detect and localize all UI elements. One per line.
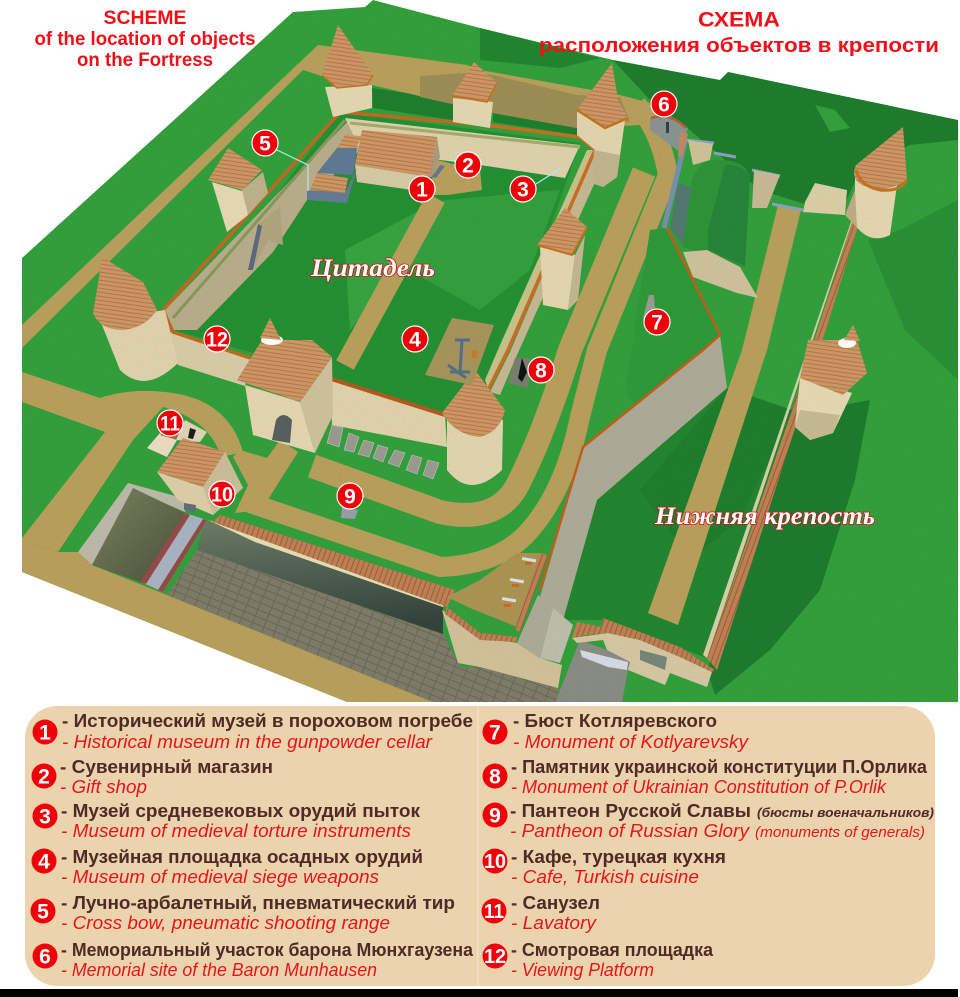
shaded section of north road — [420, 72, 630, 128]
grass light and shadow patches — [173, 28, 958, 695]
legend item 8: - Monument of Ukrainian Constitution of P.Orlik — [511, 777, 887, 797]
title, Russian: расположения объектов в крепости — [539, 35, 939, 57]
orange edge of upper fortress — [540, 228, 720, 590]
marker 4 — [402, 326, 428, 352]
legend item 12: 12 — [484, 946, 506, 968]
legend item 3: - Museum of medieval torture instruments — [61, 821, 411, 841]
legend item 4: - Museum of medieval siege weapons — [61, 867, 379, 887]
legend item 5: 5 — [37, 900, 49, 924]
moat far wall — [92, 488, 185, 583]
legend item 6 — [32, 940, 474, 980]
legend item 7 — [482, 711, 749, 752]
road in lower fortress — [648, 205, 801, 625]
monument 8 — [508, 358, 530, 388]
marker 2: 2 — [462, 154, 474, 178]
orange wall tops — [163, 112, 486, 358]
legend item 11: - Санузел — [511, 893, 600, 913]
legend item 9 — [482, 801, 934, 841]
outer road along north side — [22, 45, 650, 348]
legend item 9: (бюсты военачальников) — [757, 806, 934, 820]
moat rim — [78, 483, 190, 565]
label: citadel: Цитадель — [310, 255, 435, 282]
legend item 9: (monuments of generals) — [755, 825, 925, 841]
tiled wall top — [213, 515, 455, 607]
wall, south east face — [330, 378, 447, 447]
legend item 10: - Cafe, Turkish cuisine — [511, 867, 699, 887]
marker 5 — [252, 130, 278, 156]
round tower, south west — [93, 257, 178, 381]
fortress map scene — [0, 0, 960, 702]
round tower, south east — [442, 370, 505, 485]
marker 7 — [644, 309, 670, 335]
legend item 1: - Исторический музей в пороховом погребе — [62, 711, 473, 731]
marker 11: 11 — [160, 412, 180, 436]
legend item 9: - Пантеон Русской Славы — [510, 801, 751, 821]
tower, north middle — [452, 62, 497, 128]
marker 8 — [528, 357, 554, 383]
legend item 2: - Gift shop — [60, 777, 147, 797]
legend item 2: 2 — [38, 766, 50, 788]
inner wall, north — [345, 118, 580, 178]
siege weapons museum platform — [425, 318, 494, 385]
marker 4: 4 — [409, 328, 421, 352]
legend item 8 — [482, 757, 928, 797]
legend item 6: 6 — [39, 946, 51, 968]
map markers — [157, 91, 677, 509]
barbican tower 10 — [157, 438, 243, 515]
stone wedge left — [688, 140, 713, 165]
passage — [670, 183, 692, 245]
marker 9: 9 — [344, 486, 356, 508]
legend item 2 — [32, 757, 273, 797]
marker 12: 12 — [206, 328, 228, 352]
moat — [78, 483, 560, 702]
bottom black bar — [0, 989, 958, 997]
road around citadel, outer — [250, 105, 668, 567]
legend panel — [25, 706, 935, 986]
legend item 4: 4 — [38, 850, 50, 874]
hill stone end — [683, 250, 758, 298]
citadel walls — [163, 112, 605, 447]
legend item 10: 10 — [484, 851, 506, 873]
legend item 5: - Cross bow, pneumatic shooting range — [61, 913, 390, 933]
legend item 10 — [482, 847, 726, 887]
legend item 7: - Бюст Котляревского — [513, 711, 717, 731]
legend item 9: 9 — [489, 804, 501, 828]
legend item 10: - Кафе, турецкая кухня — [511, 847, 726, 867]
moat inner wall — [197, 520, 443, 634]
monument 7 bust — [643, 295, 655, 320]
legend item 3 — [32, 801, 421, 841]
marker 3: 3 — [517, 178, 529, 202]
road inside citadel — [345, 198, 436, 365]
memorial site 6 — [650, 116, 688, 157]
title, English: on the Fortress — [77, 50, 213, 71]
tower, north east — [577, 63, 628, 187]
right wall of lower fortress — [703, 207, 863, 670]
title, English: SCHEME — [104, 8, 186, 29]
pantheon busts row — [327, 425, 439, 479]
tower, west — [208, 148, 268, 232]
casemate hill — [664, 138, 803, 298]
sand border around moat — [22, 540, 433, 702]
tower, north west — [322, 25, 373, 117]
legend item 1: 1 — [39, 722, 51, 744]
marker 7: 7 — [651, 312, 663, 334]
legend item 12 — [482, 940, 714, 980]
legend item 4: - Музейная площадка осадных орудий — [61, 847, 423, 867]
marker 9 — [337, 483, 363, 509]
right round tower — [803, 127, 907, 238]
marker 6 — [651, 91, 677, 117]
legend item 11: - Lavatory — [511, 913, 597, 933]
legend item 9: - Pantheon of Russian Glory — [510, 821, 750, 841]
marker 6: 6 — [658, 94, 670, 116]
leader lines — [275, 149, 561, 191]
citadel scarp, lower wall — [540, 335, 727, 620]
title, Russian — [539, 8, 939, 57]
inner wall, west — [165, 122, 360, 330]
museum and shop buildings — [307, 130, 445, 203]
marker 10: 10 — [211, 484, 233, 506]
label: lower fortress: Нижняя крепость — [654, 503, 875, 530]
road junction at gate — [233, 440, 298, 513]
marker 1: 1 — [416, 178, 428, 202]
texture overlay — [22, 0, 960, 702]
sand patch by buildings — [428, 160, 482, 195]
legend item 1: - Historical museum in the gunpowder cellar — [62, 732, 433, 752]
wall, east outer — [490, 150, 605, 395]
legend item 12: - Смотровая площадка — [511, 940, 714, 960]
legend item 8: - Памятник украинской конституции П.Орлика — [511, 757, 928, 777]
marker 5: 5 — [259, 132, 271, 156]
wall, south west face — [170, 332, 250, 386]
hill grass — [683, 160, 750, 267]
title, English: of the location of objects — [34, 29, 256, 50]
wall buttress — [252, 206, 283, 270]
legend item 5: - Лучно-арбалетный, пневматический тир — [61, 893, 455, 913]
gate tower with lantern — [237, 318, 333, 453]
marker 1 — [409, 176, 435, 202]
marker 3 — [510, 176, 536, 202]
monument 9 pedestal — [341, 507, 358, 519]
sand roads network — [250, 105, 668, 567]
legend item 3: 3 — [39, 806, 51, 828]
title, Russian: СХЕМА — [698, 8, 780, 32]
corner masonry at the south — [442, 595, 715, 702]
legend item 12: - Viewing Platform — [511, 960, 654, 980]
marker 2 — [455, 152, 481, 178]
lower right round tower with lantern — [795, 325, 867, 440]
bridge — [140, 513, 207, 592]
legend item 6: - Мемориальный участок барона Мюнхгаузена — [61, 940, 474, 960]
cannon platform — [447, 553, 548, 632]
road around citadel, inner — [312, 172, 644, 515]
legend item 7: - Monument of Kotlyarevsky — [513, 732, 749, 752]
legend item 6: - Memorial site of the Baron Munhausen — [61, 960, 377, 980]
west road junction and arc to gate — [22, 372, 243, 552]
legend item 11: 11 — [484, 901, 504, 923]
stone wedge right — [752, 170, 780, 208]
legend item 8: 8 — [489, 766, 501, 788]
marker 8: 8 — [535, 360, 547, 382]
legend item 4 — [32, 847, 423, 887]
legend item 1 — [32, 711, 473, 752]
plateau of monument 7 — [646, 229, 657, 257]
legend item 3: - Музей средневековых орудий пыток — [61, 801, 421, 821]
tower, east — [537, 208, 587, 310]
legend item 11 — [482, 893, 600, 933]
legend item 5 — [30, 893, 455, 933]
title, English — [34, 8, 256, 71]
legend item 2: - Сувенирный магазин — [60, 757, 273, 777]
cream wall band — [208, 520, 447, 607]
wall, east inner — [485, 150, 595, 388]
legend item 7: 7 — [489, 722, 501, 744]
moat pavers — [167, 550, 560, 702]
terrain: grass ground — [0, 0, 960, 702]
blue trim walls — [664, 138, 686, 228]
lavatory 11 building — [147, 420, 207, 457]
